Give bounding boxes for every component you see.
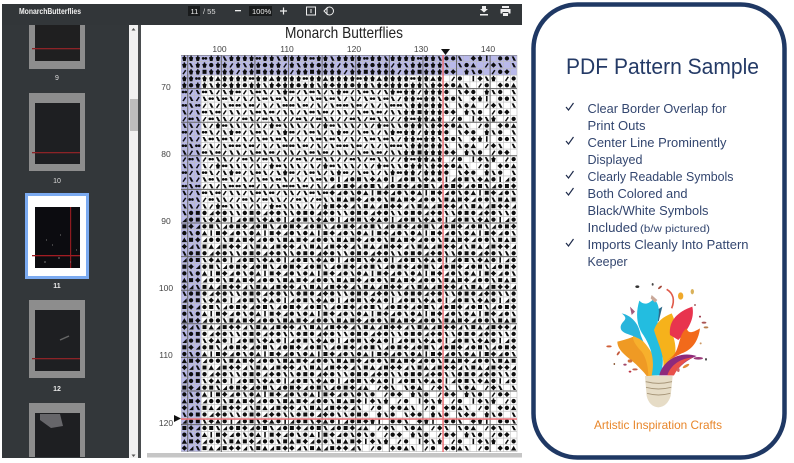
card heading: PDF Pattern Sample	[566, 54, 759, 79]
left center marker	[174, 415, 181, 422]
column numbers: 130	[414, 44, 428, 54]
panel: feature card	[534, 4, 784, 458]
bulb base	[645, 376, 673, 407]
column numbers: 100	[212, 44, 227, 54]
thumbnail page 10: 10	[53, 178, 61, 185]
thumbnail page 11 selected	[26, 194, 88, 290]
row numbers: 90	[161, 216, 171, 226]
check item: border overlap: Print Outs	[588, 118, 646, 133]
row numbers: 100	[159, 283, 173, 293]
toolbar	[2, 4, 522, 25]
thumbnail page 13	[29, 403, 85, 457]
flames	[617, 298, 700, 376]
toolbar file name: MonarchButterflies	[19, 7, 82, 16]
zoom controls	[235, 6, 287, 16]
page title: Monarch Butterflies	[285, 25, 403, 42]
thumbnail page 10	[29, 93, 85, 185]
row numbers: 120	[159, 418, 173, 428]
feature checklist	[566, 101, 748, 269]
page number box	[188, 6, 216, 16]
thumbnail page 9: 9	[55, 75, 59, 82]
check item: colored and black/white: Included	[588, 220, 638, 235]
icon: fit to page	[306, 7, 316, 15]
icon: colorful splash light bulb	[606, 283, 708, 407]
icon: download	[480, 6, 488, 16]
row numbers: 110	[159, 350, 173, 360]
icon: rotate	[324, 7, 334, 15]
column numbers: 120	[347, 44, 361, 54]
thumbnail page 11 selected: 11	[53, 283, 61, 290]
row numbers: 70	[161, 82, 171, 92]
check item: pattern keeper	[566, 237, 748, 269]
panel: thumbnail sidebar	[2, 25, 141, 458]
page number box: / 55	[203, 7, 216, 16]
thumbnail page 12: 12	[53, 386, 61, 393]
check item: border overlap	[566, 101, 727, 133]
check item: center line: Center Line Prominently	[588, 135, 727, 150]
thumbnail page 12	[29, 300, 85, 393]
paint splatter	[606, 283, 708, 373]
page number box: 11	[190, 7, 198, 16]
zoom controls: 100%	[252, 7, 272, 16]
sidebar scrollbar	[129, 25, 138, 458]
check item: center line	[566, 135, 727, 167]
column numbers: 110	[280, 44, 294, 54]
top center marker	[441, 49, 450, 55]
check item: colored and black/white: Both Colored and	[588, 186, 688, 201]
blue overlap borders	[181, 55, 517, 452]
column numbers	[212, 44, 495, 54]
thumbnail page 9	[29, 25, 85, 82]
check item: center line: Displayed	[588, 152, 642, 167]
column numbers: 140	[481, 44, 495, 54]
check item: colored and black/white: (b/w pictured)	[640, 223, 710, 235]
check item: readable symbols: Clearly Readable Symbols	[588, 169, 734, 184]
panel: PDF viewer screenshot	[2, 4, 557, 458]
row numbers: 80	[161, 149, 171, 159]
row numbers	[159, 82, 173, 428]
horizontal scrollbar	[147, 453, 522, 458]
icon: print	[500, 6, 510, 16]
brand name: Artistic Inspiration Crafts	[594, 418, 722, 432]
red vertical center line	[442, 55, 444, 452]
check item: pattern keeper: Imports Cleanly Into Pattern	[588, 237, 748, 252]
check item: pattern keeper: Keeper	[588, 254, 628, 269]
check item: colored and black/white	[566, 186, 710, 235]
panel: pattern page	[147, 26, 522, 458]
check item: border overlap: Clear Border Overlap for	[588, 101, 727, 116]
check item: colored and black/white: Black/White Symbols	[588, 203, 709, 218]
cross-stitch symbol chart	[181, 55, 518, 452]
red horizontal center line	[181, 418, 517, 420]
